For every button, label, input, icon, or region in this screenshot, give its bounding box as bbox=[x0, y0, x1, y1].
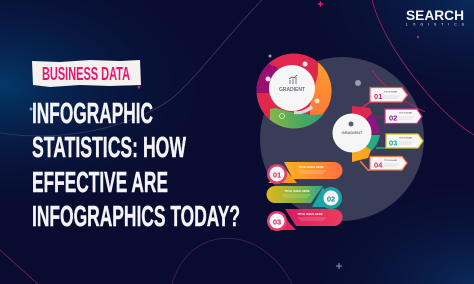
ring segment: green bbox=[365, 135, 380, 151]
center label: GRADIENT bbox=[279, 87, 305, 93]
pill 02: TITLE GOES HERE bbox=[284, 189, 310, 193]
donut segment: orange right bbox=[310, 63, 332, 115]
pill 03 bbox=[267, 209, 342, 231]
center white circle bbox=[332, 114, 372, 152]
icon: dot bbox=[266, 76, 270, 82]
title: INFOGRAPHIC bbox=[32, 98, 153, 130]
pill 02 bbox=[266, 186, 342, 209]
label 01 bbox=[370, 88, 408, 102]
logo: search logistics: SEARCH bbox=[406, 7, 464, 23]
title bbox=[32, 98, 240, 233]
pill 02: 02 bbox=[327, 194, 335, 204]
donut base: red bbox=[256, 54, 332, 128]
label 03: 03 bbox=[389, 138, 397, 148]
donut chart: gradient bbox=[256, 54, 332, 128]
label 02: 02 bbox=[389, 114, 397, 122]
pill 03: TITLE GOES HERE bbox=[297, 212, 323, 216]
large dark circle backdrop bbox=[260, 57, 424, 221]
small grey dot bbox=[355, 80, 361, 86]
center white circle bbox=[269, 65, 315, 111]
connectors bbox=[360, 102, 370, 109]
donut segment: purple left bbox=[256, 64, 278, 93]
label 04 bbox=[370, 156, 407, 170]
ring segment: purple bbox=[365, 114, 380, 133]
title: STATISTICS: HOW bbox=[32, 132, 186, 164]
label 02 bbox=[385, 109, 422, 124]
center label: GRADIENT bbox=[342, 131, 363, 135]
ring segment: orange bbox=[352, 146, 371, 162]
icon: mini chart bbox=[289, 75, 297, 84]
tag: business data bbox=[32, 60, 141, 87]
label 01: TITLE NAME bbox=[384, 90, 398, 94]
logo: search logistics: L O G I S T I C S bbox=[406, 22, 465, 26]
label 01: 01 bbox=[374, 92, 382, 101]
tag: business data: BUSINESS DATA bbox=[42, 64, 130, 84]
title: INFOGRAPHICS TODAY? bbox=[32, 201, 240, 233]
pill 01: TITLE GOES HERE bbox=[298, 165, 324, 169]
icon: clock bbox=[280, 114, 284, 118]
inner shadow crescent bbox=[294, 105, 313, 114]
label 03 bbox=[386, 134, 423, 148]
pill 03: 03 bbox=[273, 218, 281, 226]
pill 01: 01 bbox=[273, 170, 281, 180]
ring chart with four arrows bbox=[332, 88, 423, 170]
ring segment: red bbox=[352, 106, 372, 120]
label 04: 04 bbox=[374, 160, 383, 170]
donut segment: green bottom bbox=[269, 108, 324, 128]
icon: gear bbox=[302, 62, 308, 66]
curved accent line bbox=[372, 70, 425, 112]
icon: bulb bbox=[314, 98, 320, 104]
label 02: TITLE NAME bbox=[399, 112, 413, 114]
label 04: TITLE NAME bbox=[384, 159, 398, 162]
center icon bbox=[348, 122, 354, 126]
title: EFFECTIVE ARE bbox=[32, 167, 168, 199]
pill 01 bbox=[267, 162, 342, 184]
label 03: TITLE NAME bbox=[399, 136, 413, 140]
